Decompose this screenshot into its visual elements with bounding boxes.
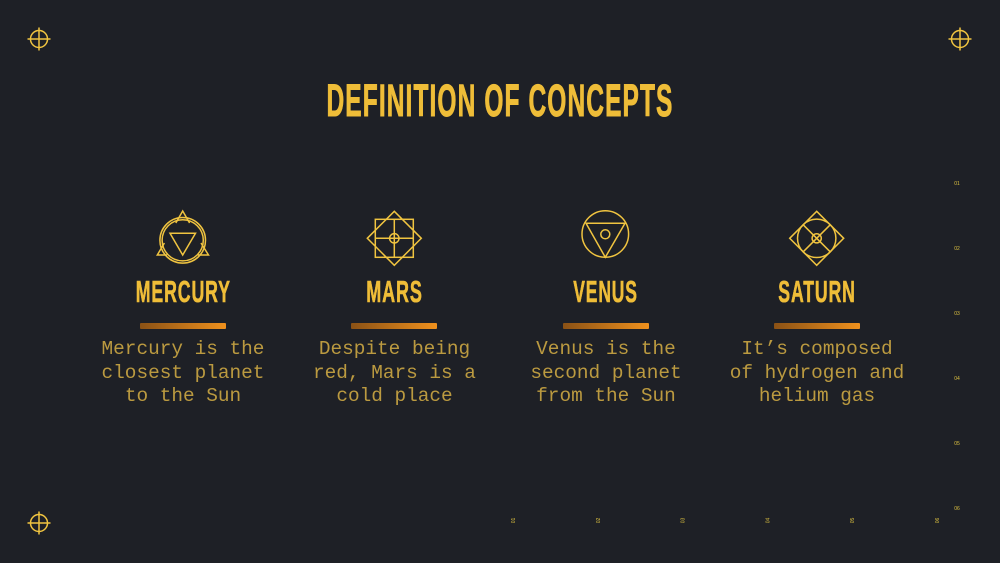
text: mars description: red, Mars is a <box>313 362 476 384</box>
icon: saturn symbol <box>790 211 844 265</box>
text: mars description: cold place <box>336 385 453 407</box>
divider bar <box>351 323 437 329</box>
icon: crosshair top left <box>28 28 50 50</box>
icon: mars symbol <box>367 211 421 265</box>
right axis numbers: 03 <box>954 311 960 317</box>
heading: saturn: SATURN <box>778 274 856 309</box>
right axis numbers: 01 <box>954 181 960 187</box>
text: saturn description: helium gas <box>759 385 875 407</box>
right axis numbers: 02 <box>954 246 960 252</box>
divider bar <box>563 323 649 329</box>
right axis numbers: 05 <box>954 441 960 447</box>
panel: mars <box>313 211 476 407</box>
title: DEFINITION OF CONCEPTS <box>326 75 674 126</box>
bottom axis numbers: 04 <box>766 518 772 523</box>
icon: mercury symbol <box>157 211 208 263</box>
text: mercury description: Mercury is the <box>102 338 264 360</box>
text: venus description: from the Sun <box>536 385 676 407</box>
right axis numbers <box>954 181 960 512</box>
icon: venus symbol <box>582 211 629 257</box>
right axis numbers: 04 <box>954 376 960 382</box>
text: mars description: Despite being <box>319 338 470 360</box>
text: venus description: second planet <box>530 362 682 384</box>
panel: saturn <box>730 211 904 407</box>
icon: crosshair bottom left <box>28 512 50 534</box>
heading: mercury: MERCURY <box>136 274 231 309</box>
bottom axis numbers: 05 <box>850 518 856 523</box>
right axis numbers: 06 <box>954 506 960 512</box>
text: venus description: Venus is the <box>536 338 676 360</box>
bottom axis numbers: 06 <box>935 518 941 523</box>
icon: crosshair top right <box>948 28 972 50</box>
heading: venus: VENUS <box>573 274 638 309</box>
bottom axis numbers: 01 <box>511 518 517 523</box>
panel: mercury <box>102 211 264 407</box>
heading: mars: MARS <box>366 274 423 309</box>
bottom axis numbers <box>511 518 941 523</box>
text: mercury description: to the Sun <box>125 385 241 407</box>
bottom axis numbers: 02 <box>596 518 602 523</box>
text: mercury description: closest planet <box>102 362 264 384</box>
text: saturn description: of hydrogen and <box>730 362 904 384</box>
divider bar <box>774 323 860 329</box>
panel: venus <box>530 211 682 407</box>
text: saturn description: It’s composed <box>741 338 893 360</box>
bottom axis numbers: 03 <box>681 518 687 523</box>
divider bar <box>140 323 226 329</box>
